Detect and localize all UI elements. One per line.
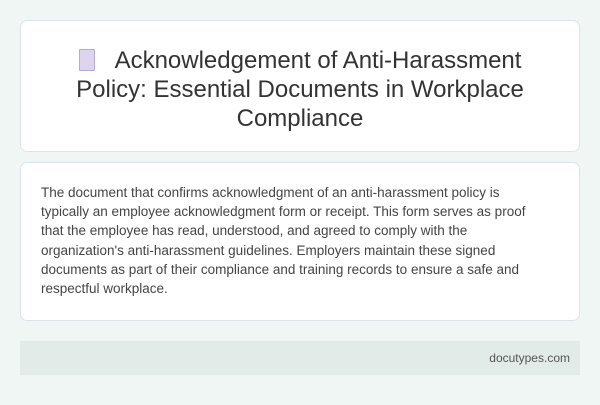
- footer: [20, 341, 580, 375]
- title: Acknowledgement of Anti-Harassment Policy: Essential Documents in Workplace Compliance: [76, 47, 524, 132]
- footer text: docutypes.com: [489, 351, 570, 365]
- panel: title card: [20, 20, 580, 152]
- text block: The document that confirms acknowledgment of an anti-harassment policy is typically an employee acknowledgment form or receipt. This form serves as proof that the employee has read, understood, and agreed to comply with the organization's anti-harassment guidelines. Employers maintain these signed documents as part of their compliance and training records to ensure a safe and respectful workplace.: [41, 185, 525, 296]
- panel: description: [20, 162, 580, 321]
- icon: document: [79, 49, 95, 71]
